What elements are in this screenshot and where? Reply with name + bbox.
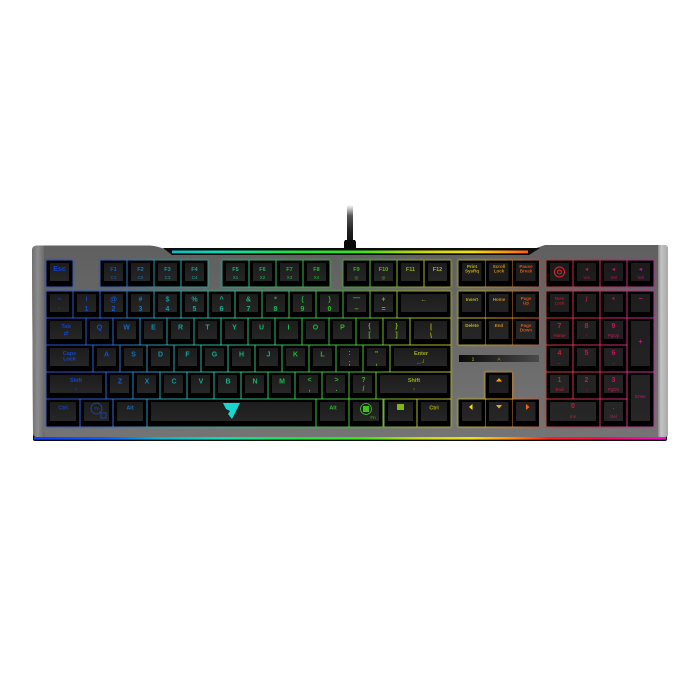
function key row: F5	[232, 267, 239, 273]
numeric keypad	[547, 261, 653, 426]
QWERTY key row: ⇄	[64, 329, 69, 337]
home key row: A	[104, 352, 109, 358]
cable	[344, 205, 356, 248]
QWERTY key row: T	[205, 324, 210, 332]
number key row: 5	[193, 306, 197, 313]
function key row: F7	[286, 267, 293, 273]
function key row: ◎	[355, 275, 360, 280]
QWERTY key row: I	[288, 324, 290, 332]
shift key row	[47, 373, 450, 398]
QWERTY key row: [	[368, 332, 371, 339]
home key row: K	[293, 352, 298, 358]
numeric keypad: 5	[585, 350, 589, 357]
function key row: F3	[164, 267, 171, 273]
QWERTY key row: P	[340, 324, 345, 332]
function key row: F10	[379, 267, 388, 273]
function key row: Esc	[53, 266, 66, 273]
shift key row: B	[225, 378, 231, 386]
number key row: )	[328, 296, 331, 304]
number key row: 8	[274, 306, 278, 313]
bottom modifier row	[47, 400, 450, 426]
key backlight glow	[47, 261, 653, 426]
function key row: F11	[406, 267, 415, 273]
number key row: !	[85, 296, 88, 304]
numeric keypad: Num	[555, 296, 564, 301]
home key row: ←┘	[416, 359, 426, 366]
number key row: 7	[247, 306, 251, 313]
number key row: ←	[420, 296, 428, 304]
number key row: —	[353, 295, 360, 302]
shift key row: V	[199, 378, 204, 386]
number key row: &	[246, 296, 251, 304]
navigation cluster: Delete	[465, 323, 479, 328]
numeric keypad: Del	[610, 414, 617, 419]
shift key row: /	[363, 386, 365, 393]
numeric keypad: ↓	[585, 387, 588, 392]
keyboard chassis	[32, 245, 668, 441]
bottom modifier row: Ctrl	[58, 406, 68, 412]
numeric keypad: ◄	[611, 267, 616, 273]
number key row: $	[166, 296, 170, 304]
icon: menu	[397, 404, 404, 410]
numeric keypad: Home	[553, 333, 566, 338]
navigation cluster	[459, 261, 538, 344]
navigation cluster: Down	[520, 328, 532, 332]
number key row: *	[274, 296, 277, 304]
navigation cluster: Up	[523, 300, 529, 306]
home key row: J	[267, 352, 271, 358]
shift key row: ,	[309, 386, 311, 393]
numeric keypad: 7	[558, 323, 562, 330]
numeric keypad: 9	[612, 323, 616, 330]
navigation cluster: Pause	[519, 264, 533, 269]
bottom modifier row: Alt	[329, 406, 337, 412]
shift key row: .	[336, 386, 338, 393]
numeric keypad: Vol	[637, 275, 644, 280]
navigation cluster: Page	[521, 296, 532, 301]
home key row: "	[375, 351, 378, 358]
numeric keypad: Vol	[610, 275, 617, 280]
number key row: ^	[219, 296, 224, 304]
number key row: 6	[220, 306, 224, 313]
number key row: ~	[57, 296, 62, 304]
numeric keypad: 6	[612, 350, 616, 357]
shift key row: Shift	[70, 378, 82, 384]
bottom modifier row: Alt	[126, 406, 134, 412]
lock indicator bar	[459, 355, 539, 362]
shift key row: <	[307, 377, 312, 384]
home key row	[47, 346, 450, 371]
navigation cluster: SysRq	[465, 268, 479, 274]
number key row: (	[301, 296, 304, 304]
numeric keypad: −	[638, 296, 643, 303]
number key row	[47, 292, 450, 317]
QWERTY key row: ]	[395, 332, 398, 339]
function key row: F8	[313, 267, 320, 273]
navigation cluster: Print	[467, 264, 478, 269]
number key row: –	[355, 306, 359, 313]
function key row: F9	[353, 267, 360, 273]
bottom modifier row: Ctrl	[429, 406, 439, 412]
shift key row: ?	[361, 377, 366, 384]
numeric keypad: ◄	[584, 267, 589, 273]
numeric keypad: +	[638, 339, 643, 346]
function key row: F6	[259, 267, 266, 273]
QWERTY key row: }	[395, 323, 398, 330]
numeric keypad: *	[612, 297, 615, 304]
numeric keypad: 3	[612, 377, 616, 384]
function key row: C3	[165, 275, 171, 280]
number key row: %	[191, 296, 198, 304]
QWERTY key row: R	[178, 324, 183, 332]
lock indicator bar: 1	[472, 356, 475, 362]
home key row: :	[348, 350, 351, 357]
numeric keypad: /	[586, 297, 588, 304]
space bar logo	[223, 403, 240, 419]
function key row: X1	[233, 275, 239, 280]
home key row: L	[320, 352, 325, 358]
navigation cluster: Scroll	[493, 264, 505, 269]
number key row: +	[381, 296, 386, 304]
QWERTY key row: Tab	[61, 324, 71, 330]
home key row: Caps	[63, 351, 76, 357]
numeric keypad: Enter	[635, 394, 646, 399]
numeric keypad: PgUp	[608, 333, 620, 338]
number key row: #	[139, 296, 143, 304]
numeric keypad: 2	[585, 377, 589, 384]
shift key row: M	[279, 378, 285, 386]
function key row: C4	[192, 275, 198, 280]
numeric keypad: .	[613, 404, 615, 411]
numeric keypad: 4	[558, 350, 562, 357]
numeric keypad: PgDn	[608, 387, 620, 392]
shift key row: ↑	[413, 387, 416, 393]
number key row: 1	[85, 306, 89, 313]
navigation cluster: Lock	[494, 268, 505, 274]
shift key row: Shift	[408, 378, 420, 384]
icon: game mode button	[554, 267, 564, 277]
numeric keypad: 0	[571, 403, 575, 410]
top RGB light strip	[172, 250, 528, 253]
home key row: G	[212, 352, 218, 358]
number key row: ·	[58, 306, 61, 313]
bottom modifier row: Fn	[94, 406, 100, 411]
home key row: Enter	[414, 351, 429, 357]
function key row: F4	[191, 267, 199, 273]
numeric keypad: →	[611, 360, 616, 365]
numeric keypad: Lock	[555, 300, 565, 306]
numeric keypad: ◄	[638, 267, 643, 273]
function key row: C2	[138, 275, 144, 280]
icon: Windows target	[360, 404, 372, 414]
function key row: F12	[433, 267, 442, 273]
shift key row: X	[145, 378, 150, 386]
shift key row: C	[171, 378, 177, 386]
QWERTY key row: {	[368, 323, 371, 330]
shift key row: ↑	[75, 387, 78, 393]
QWERTY key row: U	[259, 324, 264, 332]
home key row: Lock	[63, 356, 77, 362]
navigation cluster: Page	[521, 323, 532, 328]
home key row: ;	[348, 360, 351, 367]
function key row: F2	[137, 267, 144, 273]
function key row: X4	[314, 275, 320, 280]
QWERTY key row: |	[430, 324, 432, 331]
home key row: D	[158, 352, 163, 358]
shift key row: Z	[118, 378, 123, 386]
QWERTY key row: Y	[232, 324, 237, 332]
function key row: C1	[111, 275, 117, 280]
numeric keypad: End	[555, 387, 564, 392]
QWERTY key row: W	[123, 324, 130, 332]
number key row: @	[110, 296, 117, 304]
numeric keypad: 8	[585, 323, 589, 330]
function key row: X2	[260, 275, 266, 280]
QWERTY key row: O	[313, 324, 319, 332]
number key row: 9	[301, 306, 305, 313]
shift key row: N	[252, 378, 258, 386]
QWERTY key row	[47, 319, 450, 344]
function key row: F1	[110, 267, 117, 273]
navigation cluster: Home	[493, 297, 506, 302]
QWERTY key row: \	[430, 333, 432, 340]
function key row	[47, 261, 450, 286]
bottom RGB light strip	[34, 437, 666, 440]
function key row: X3	[287, 275, 293, 280]
icon: Fn target	[91, 403, 106, 418]
navigation cluster: Insert	[466, 297, 479, 302]
numeric keypad: Vol	[583, 275, 590, 280]
numeric keypad: ↑	[585, 333, 588, 338]
number key row: 3	[139, 306, 143, 313]
number key row: 2	[112, 306, 116, 313]
arrow keys	[459, 373, 538, 426]
home key row: S	[131, 352, 136, 358]
bottom modifier row: Fn	[370, 415, 376, 420]
number key row: 0	[328, 306, 332, 313]
numeric keypad: ←	[557, 360, 562, 365]
numeric keypad: Ins	[570, 414, 577, 419]
lock indicator bar: A	[497, 356, 501, 362]
home key row: F	[185, 352, 190, 358]
numeric keypad: 1	[558, 377, 562, 384]
function key row: ◎	[382, 275, 387, 280]
number key row: =	[381, 306, 386, 313]
number key row: 4	[166, 306, 170, 313]
navigation cluster: Break	[520, 268, 533, 274]
home key row: H	[239, 352, 244, 358]
QWERTY key row: E	[151, 324, 156, 332]
home key row: ,	[376, 360, 378, 367]
QWERTY key row: Q	[97, 324, 103, 332]
navigation cluster: End	[495, 323, 504, 328]
shift key row: >	[334, 377, 339, 384]
